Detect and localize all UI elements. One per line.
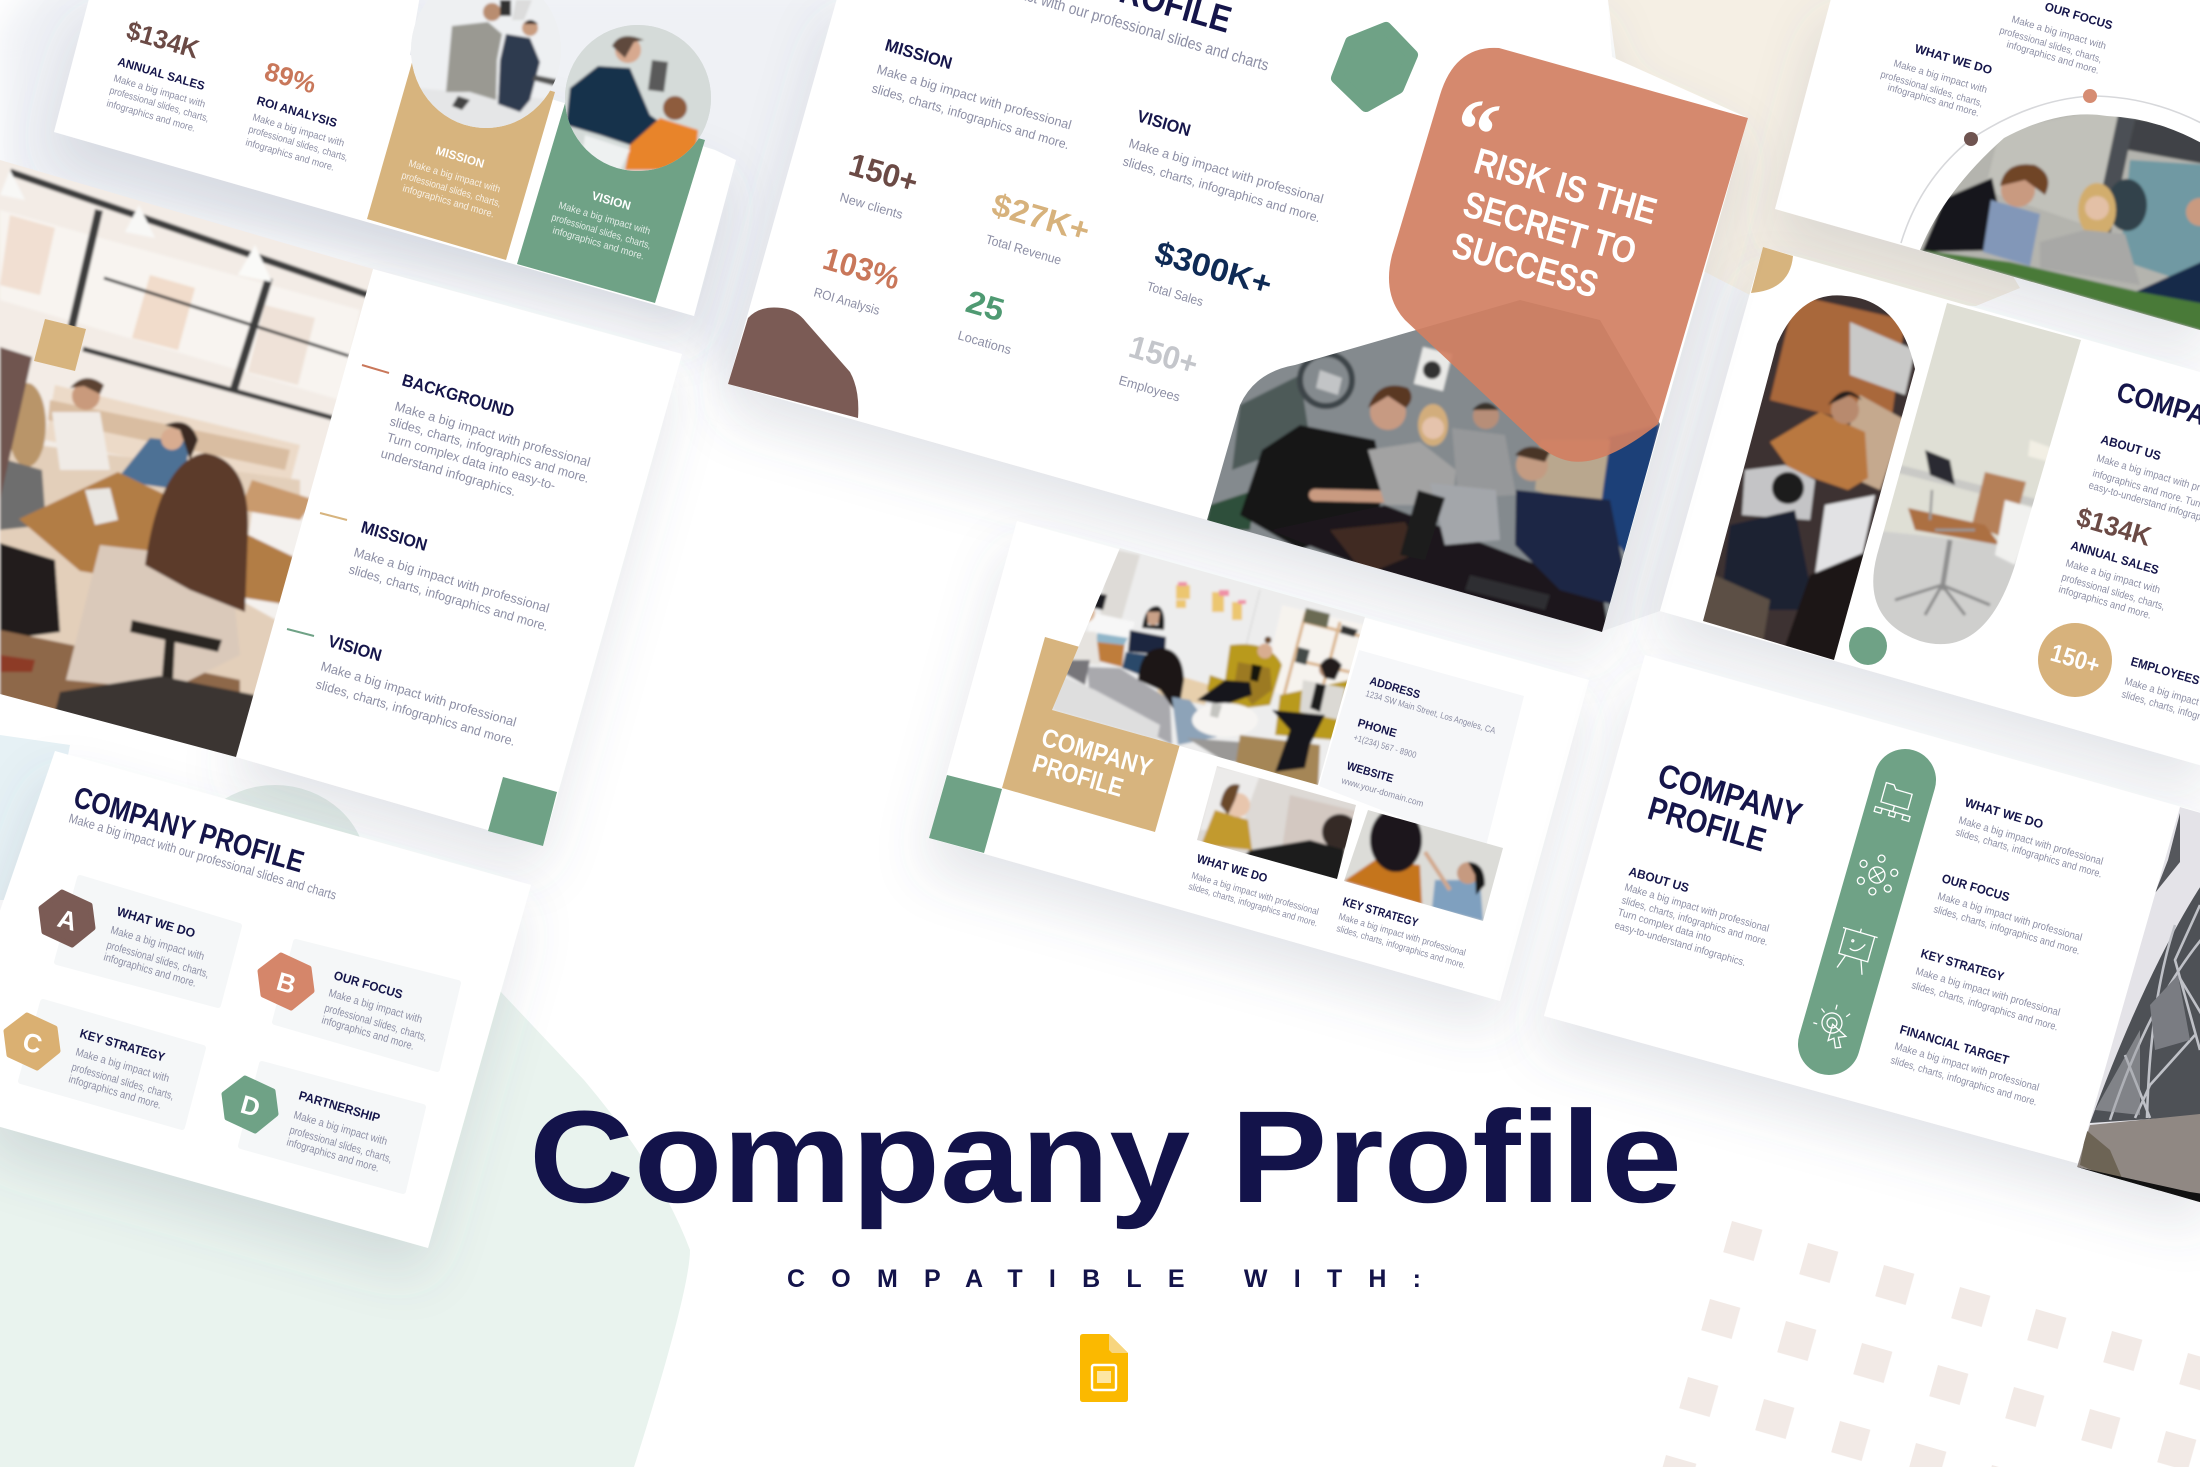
item B: OUR FOCUS [332, 968, 404, 1002]
text: mission: MISSION [883, 36, 954, 73]
stat: ROI analysis: ROI Analysis [812, 284, 882, 318]
item A: WHAT WE DO [115, 904, 197, 941]
text: vision: slides, charts, infographics and more. [1121, 153, 1322, 225]
text: about us: Make a big impact with professional [1623, 881, 1770, 935]
dot green [1849, 627, 1887, 665]
text: what we do: Make a big impact with professional [1190, 870, 1320, 918]
card: mission: Make a big impact with [407, 158, 501, 195]
text: background: BACKGROUND [400, 371, 516, 421]
text: our focus [1932, 871, 2083, 957]
text: financial target: slides, charts, infographics and more. [1889, 1054, 2038, 1108]
text: vision: Make a big impact with professional [319, 658, 518, 730]
text: key strategy: slides, charts, infographics and more. [1910, 979, 2059, 1033]
slide: four lettered items [0, 751, 531, 1248]
icon: people network [1853, 850, 1901, 900]
text: what we do: WHAT WE DO [1963, 795, 2045, 832]
text: financial target [1889, 1022, 2040, 1108]
item D: Make a big impact with [292, 1109, 389, 1148]
text: what we do: WHAT WE DO [1913, 41, 1994, 77]
accent: green hexagon [1337, 28, 1412, 106]
main title: Company Profile [529, 1083, 1682, 1230]
text: our focus: OUR FOCUS [1940, 871, 2011, 904]
item A [41, 878, 239, 1005]
item C: infographics and more. [67, 1073, 163, 1112]
text: what we do [1954, 795, 2104, 880]
slide: annual sales mission vision [54, 0, 736, 316]
item B [260, 942, 458, 1069]
accent square gold [34, 319, 86, 371]
background: cream shape top right [1608, 0, 2020, 306]
slide: about us with two arch photos [1660, 247, 2200, 768]
item B: B [273, 966, 300, 1000]
text: our focus: slides, charts, infographics and more. [1932, 903, 2081, 957]
text: financial target: Make a big impact with professional [1893, 1040, 2040, 1094]
text: vision: VISION [1135, 107, 1193, 140]
stat: annual sales: professional slides, charts, [2060, 571, 2166, 613]
text: what we do [1879, 41, 1994, 119]
text: vision: Make a big impact with professional [1127, 135, 1325, 206]
accent square green [929, 775, 1002, 853]
text: key strategy: Make a big impact with professional [1337, 911, 1467, 959]
text: mission [320, 513, 551, 634]
slide background [929, 521, 1589, 1001]
icon: presentation board [1832, 924, 1879, 976]
background: grey shape top left [0, 0, 860, 400]
text: vision: slides, charts, infographics and more. [314, 676, 517, 749]
text: address: ADDRESS [1368, 675, 1422, 702]
text: what we do: Make a big impact with professional [1957, 814, 2104, 868]
background: mint circle behind slide [183, 785, 367, 955]
text: address: 1234 SW Main Street, Los Angeles, CA [1364, 688, 1497, 736]
slide background [1775, 0, 2200, 333]
text: our focus: Make a big impact with [2010, 14, 2107, 52]
slide: about us with icon pill [1544, 655, 2200, 1210]
text: what we do [1187, 851, 1320, 929]
card: vision: infographics and more. [551, 225, 645, 262]
photo: glass building [2070, 800, 2200, 1210]
text: what we do: Make a big impact with [1892, 58, 1988, 96]
text: what we do: WHAT WE DO [1195, 851, 1269, 885]
item A: Make a big impact with [109, 924, 206, 963]
quote text: SUCCESS [1448, 224, 1603, 306]
text: website: WEBSITE [1345, 760, 1395, 785]
text: vision: VISION [326, 632, 384, 665]
slide: what we do and our focus with arc photo [1775, 0, 2200, 340]
icon: folder network [1874, 781, 1917, 821]
card: mission: infographics and more. [401, 183, 495, 220]
stat: ROI analysis: 89% [261, 56, 319, 99]
stat: annual sales: ANNUAL SALES [116, 54, 206, 93]
text: our focus: OUR FOCUS [2043, 0, 2114, 32]
text: key strategy: slides, charts, infographics and more. [1335, 923, 1467, 971]
slide: stats and quote [728, 0, 1748, 640]
text: our focus: professional slides, charts, [1998, 25, 2103, 66]
accent: gold quarter circle [1751, 247, 1793, 293]
text: about us [1613, 864, 1770, 969]
stat: total revenue [984, 186, 1094, 268]
text: website [1340, 760, 1425, 809]
photo: team around laptop [1920, 114, 2200, 330]
photo: team at laptop [1207, 300, 1660, 632]
text: key strategy: KEY STRATEGY [1341, 894, 1420, 930]
subtitle: Make a big impact with our professional slides and charts [67, 810, 339, 903]
gold title card [1002, 637, 1198, 832]
item C [6, 1002, 203, 1127]
slide background [1544, 655, 2200, 1200]
text: mission: slides, charts, infographics and more. [870, 80, 1071, 152]
card: mission [367, 0, 570, 260]
text: what we do: slides, charts, infographics and more. [1187, 881, 1319, 929]
text: about us: easy-to-understand infographics. [1613, 919, 1747, 969]
heading: COMPANY PROFILE [70, 781, 307, 879]
text: mission: slides, charts, infographics and more. [347, 561, 550, 634]
photo: woman at whiteboard [1344, 810, 1503, 921]
stat: annual sales [2057, 502, 2166, 622]
stat: employees [1117, 328, 1202, 405]
heading [1644, 756, 1806, 859]
stat: employees: 150+ [1125, 328, 1202, 382]
arc with dots [1901, 89, 2200, 243]
text: mission: Make a big impact with professional [352, 544, 551, 616]
text: what we do: professional slides, charts, [1879, 69, 1984, 110]
item C: C [19, 1026, 46, 1060]
photo: team at table [0, 150, 390, 770]
card: vision: Make a big impact with [557, 200, 651, 237]
card: mission: MISSION [434, 143, 486, 171]
card: vision: VISION [590, 188, 632, 213]
heading: COMPANY [1654, 756, 1806, 833]
stat: ROI analysis: infographics and more. [244, 137, 335, 174]
stat: annual sales: infographics and more. [2057, 583, 2153, 622]
text: about us: ABOUT US [2099, 432, 2162, 463]
stat: annual sales: $134K [2073, 502, 2155, 552]
stat: total sales: Total Sales [1145, 278, 1205, 309]
item B: infographics and more. [320, 1014, 416, 1053]
text: key strategy: Make a big impact with professional [1914, 965, 2061, 1019]
green icon pill [1808, 780, 1917, 1050]
gold title card: PROFILE [1029, 748, 1127, 803]
photo: arch with men at laptops [1703, 295, 1915, 660]
text: phone [1352, 717, 1418, 760]
text: key strategy [1910, 946, 2061, 1033]
text: employees [2120, 654, 2200, 742]
gold title card: COMPANY [1038, 722, 1156, 783]
item D: professional slides, charts, [288, 1124, 393, 1166]
background: pale blue shape far left [0, 735, 70, 900]
stat: new clients [838, 146, 922, 222]
item D [224, 1064, 423, 1191]
photo: woman in conversation [1197, 766, 1356, 879]
slide background [728, 0, 1748, 632]
accent square green [488, 777, 557, 846]
stat: annual sales: ANNUAL SALES [2069, 538, 2160, 577]
stat: annual sales: $134K [123, 15, 203, 65]
stat: total revenue: $27K+ [988, 186, 1094, 249]
quote mark: “ [1441, 76, 1508, 187]
stat: new clients: New clients [838, 189, 905, 222]
stat: ROI analysis: professional slides, charts, [247, 124, 349, 164]
background: pale mint shape bottom left [0, 900, 690, 1467]
quote text [1448, 140, 1661, 306]
stat: locations: 25 [962, 283, 1008, 328]
text: background: understand infographics. [379, 445, 518, 499]
card: vision [517, 20, 720, 303]
text: mission: Make a big impact with professional [875, 61, 1073, 132]
item D: infographics and more. [285, 1136, 381, 1175]
text: background: Turn complex data into easy-to- [385, 429, 557, 493]
text: address [1364, 675, 1497, 736]
background: dot grid bottom right [1640, 1216, 2200, 1467]
text: background [362, 365, 592, 499]
stat: annual sales: professional slides, charts, [108, 85, 210, 125]
text: about us: Turn complex data into [1616, 906, 1713, 945]
stat: ROI analysis: 103% [819, 240, 904, 297]
stat: ROI analysis [244, 56, 349, 174]
item C: professional slides, charts, [70, 1061, 175, 1103]
icon: click cursor [1808, 1000, 1853, 1050]
text: what we do: infographics and more. [1886, 82, 1980, 119]
text: background: Make a big impact with professional [393, 398, 592, 470]
text: our focus: Make a big impact with professional [1936, 890, 2083, 944]
text: key strategy: KEY STRATEGY [1919, 946, 2006, 984]
stat: total revenue: Total Revenue [984, 231, 1063, 268]
stat: employees: Employees [1117, 372, 1182, 405]
text: phone: PHONE [1356, 717, 1398, 740]
item A: infographics and more. [102, 951, 198, 990]
slide background [54, 0, 736, 316]
text: phone: +1(234) 567 - 8900 [1352, 732, 1418, 760]
text: what we do: slides, charts, infographics and more. [1954, 826, 2103, 880]
text: about us: ABOUT US [1627, 864, 1690, 895]
card: mission: professional slides, charts, [400, 170, 502, 210]
text: website: www.your-domain.com [1340, 775, 1425, 809]
text: vision [1121, 107, 1325, 225]
text: financial target: FINANCIAL TARGET [1898, 1022, 2011, 1068]
slide: contact and strategy [929, 521, 1589, 1001]
stat: locations [956, 283, 1014, 357]
stat: annual sales: Make a big impact with [112, 73, 206, 110]
item B: Make a big impact with [327, 987, 424, 1026]
quote text: RISK IS THE [1470, 140, 1661, 232]
quote panel [1389, 48, 1748, 462]
text: about us [2087, 432, 2200, 532]
text: mission: MISSION [359, 518, 429, 555]
card: vision: professional slides, charts, [550, 212, 652, 252]
text: vision [287, 629, 518, 749]
quote text: SECRET TO [1459, 183, 1641, 273]
item A: A [54, 903, 81, 937]
photo: capsule with office chair [1873, 303, 2081, 644]
photo: meeting in lounge [1052, 548, 1365, 785]
item D: D [237, 1089, 264, 1123]
stat: locations: Locations [956, 327, 1014, 357]
stat: new clients: 150+ [845, 146, 922, 200]
item C: KEY STRATEGY [78, 1026, 167, 1065]
stat: ROI analysis [812, 240, 904, 318]
stat: ROI analysis: Make a big impact with [251, 112, 345, 149]
item A: professional slides, charts, [105, 939, 210, 981]
stat: annual sales: Make a big impact with [2064, 557, 2162, 596]
text: about us: slides, charts, infographics and more. [1620, 894, 1769, 948]
text: key strategy [1335, 894, 1467, 971]
text: background: slides, charts, infographics and more. [388, 413, 591, 486]
slide background [1660, 247, 2200, 768]
accent: brown blob [728, 307, 858, 418]
slide: background mission vision with team photo [0, 150, 682, 846]
stat: total sales: $300K+ [1151, 234, 1276, 302]
grey contact panel [1319, 650, 1524, 850]
heading: PROFILE [1644, 789, 1770, 859]
stat: 150+ employees badge [2038, 623, 2112, 697]
text: our focus [1998, 0, 2114, 77]
item C: Make a big impact with [74, 1046, 171, 1085]
background: pale grey strip right of the quote [1600, 272, 1750, 632]
text: our focus: infographics and more. [2005, 39, 2100, 77]
stat: ROI analysis: ROI ANALYSIS [255, 93, 339, 130]
slide background [0, 751, 531, 1248]
text: mission [870, 36, 1073, 152]
slide background [236, 269, 682, 846]
item B: professional slides, charts, [323, 1002, 428, 1044]
stat: 150+ employees badge: 150+ [2047, 639, 2103, 680]
icon: google slides [1080, 1334, 1128, 1402]
item D: PARTNERSHIP [297, 1088, 382, 1125]
stat: annual sales [105, 15, 210, 135]
subtitle: compatible with: COMPATIBLE WITH: [787, 1265, 1421, 1293]
stat: annual sales: infographics and more. [105, 98, 196, 135]
